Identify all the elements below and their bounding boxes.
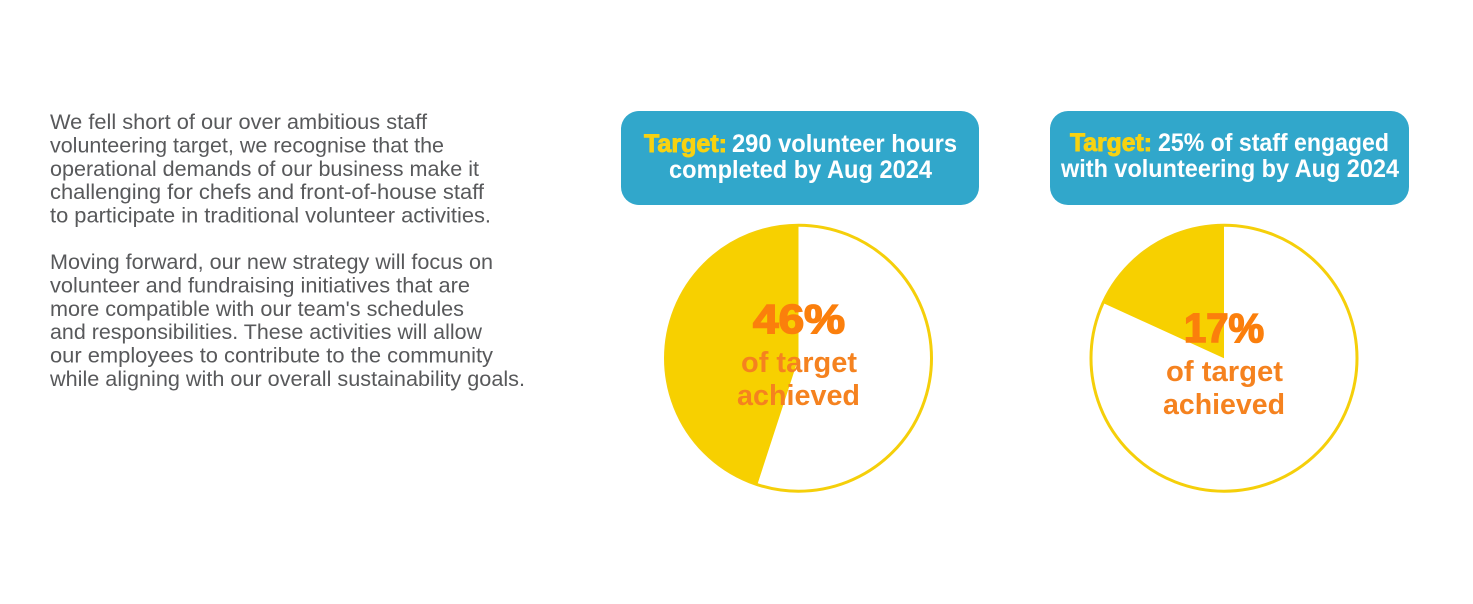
text block: shortfall explanation: We fell short of our over ambitious staff (50, 110, 427, 134)
text block: new strategy: volunteer and fundraising initiatives that are (50, 274, 470, 298)
text block: new strategy: while aligning with our overall sustainability goals. (49, 367, 525, 391)
label: 46% of target achieved (737, 296, 860, 412)
text block: shortfall explanation: to participate in traditional volunteer activities. (50, 204, 491, 228)
pie chart: 17% of engagement target (1091, 225, 1357, 491)
text block: shortfall explanation (50, 110, 491, 228)
label: 46% of target achieved: achieved (737, 380, 860, 412)
panel: volunteer hours target: completed by Aug 2024 (669, 156, 932, 184)
panel: staff engagement target (1050, 111, 1409, 205)
panel: staff engagement target: with volunteering by Aug 2024 (1060, 155, 1399, 183)
panel: staff engagement target: Target: (1070, 129, 1152, 157)
text block: shortfall explanation: challenging for chefs and front-of-house staff (50, 180, 484, 204)
text block: new strategy: more compatible with our team's schedules (50, 297, 464, 321)
label: 17% of target achieved (1163, 305, 1285, 421)
text block: shortfall explanation: operational demands of our business make it (50, 157, 479, 181)
label: 17% of target achieved: 17% (1184, 305, 1264, 351)
panel: volunteer hours target: Target: (644, 130, 727, 158)
text block: new strategy: our employees to contribute to the community (50, 344, 493, 368)
label: 17% of target achieved: of target (1166, 356, 1283, 388)
text block: shortfall explanation: volunteering target, we recognise that the (50, 134, 444, 158)
panel: volunteer hours target (621, 111, 979, 205)
text block: new strategy (49, 250, 525, 391)
panel: volunteer hours target: 290 volunteer hours (732, 130, 957, 158)
text block: new strategy: and responsibilities. These activities will allow (50, 320, 482, 344)
panel: staff engagement target: 25% of staff engaged (1158, 129, 1389, 157)
text block: new strategy: Moving forward, our new strategy will focus on (50, 250, 493, 274)
label: 46% of target achieved: 46% (753, 296, 845, 342)
label: 17% of target achieved: achieved (1163, 389, 1285, 421)
pie chart: 46% of hours target (665, 225, 932, 491)
label: 46% of target achieved: of target (741, 347, 857, 379)
